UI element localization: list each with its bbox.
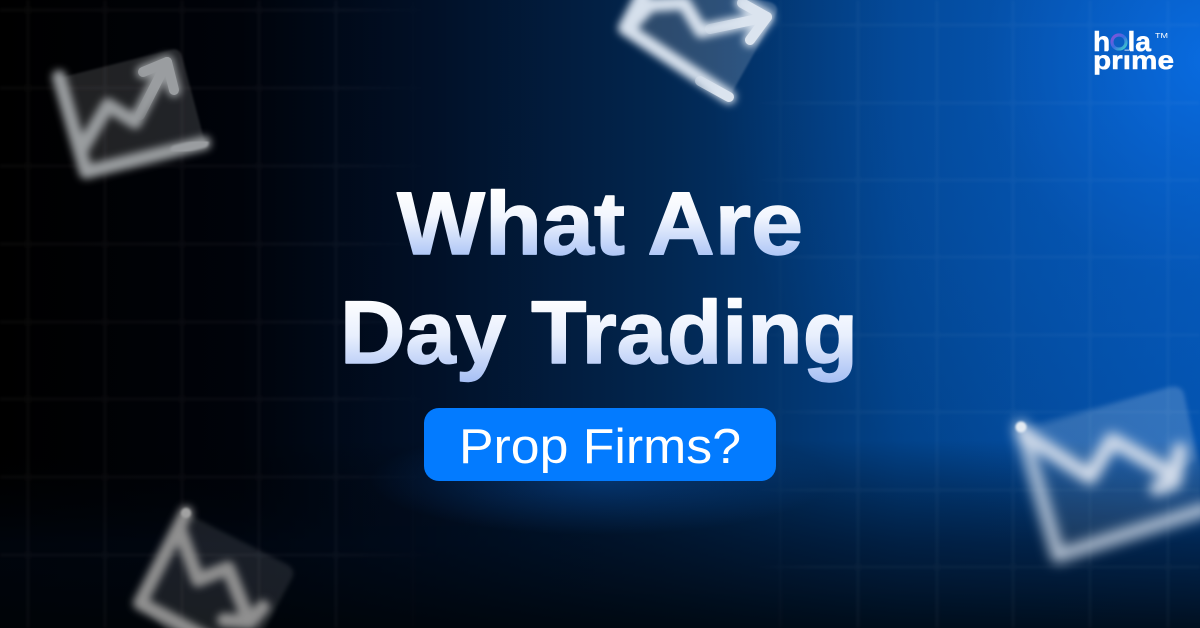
- icon: blurred falling chart right: [1016, 387, 1200, 557]
- title: [340, 173, 858, 382]
- pill: subtitle: Prop Firms?: [459, 420, 741, 474]
- logo: hola prime: TM: [1155, 31, 1168, 40]
- icon: blurred chart top centre: [625, 0, 777, 98]
- icon: blurred falling chart bottom left: [140, 508, 293, 628]
- logo: hola prime: [1093, 26, 1174, 75]
- title: What Are: [397, 173, 803, 273]
- icon: blurred rising chart top left: [59, 49, 205, 173]
- logo: hola prime: prime: [1093, 45, 1174, 75]
- logo: hola prime: hola: [1093, 26, 1151, 57]
- pill: subtitle: [424, 408, 776, 481]
- title: Day Trading: [340, 282, 858, 382]
